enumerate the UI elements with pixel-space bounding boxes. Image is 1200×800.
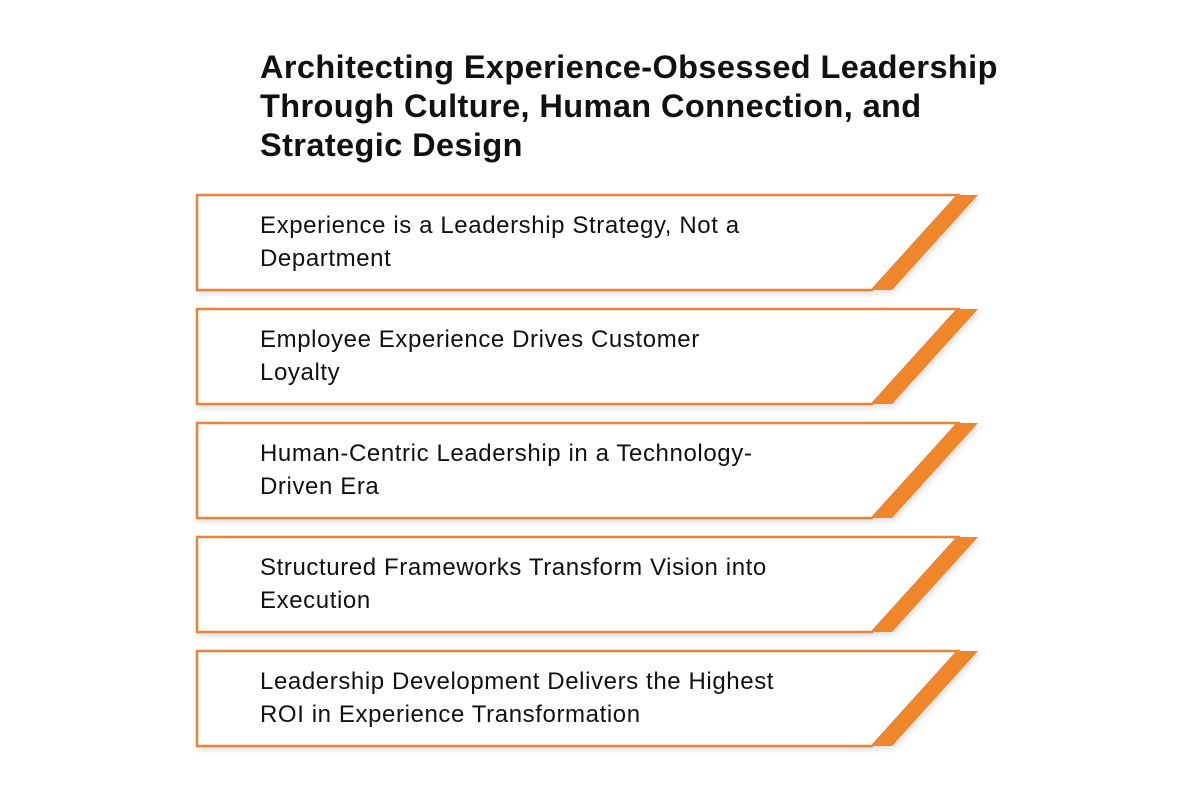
panel: item 1 bbox=[196, 194, 978, 296]
panel: item 2 bbox=[196, 308, 978, 410]
title bbox=[260, 49, 998, 163]
panel: item 1: Experience is a Leadership Strategy, Not a bbox=[260, 212, 740, 239]
panel: item 4: Structured Frameworks Transform Vision into bbox=[260, 554, 767, 581]
panel: item 5: ROI in Experience Transformation bbox=[260, 701, 641, 728]
panel: item 5 bbox=[196, 650, 978, 752]
panel: item 5: Leadership Development Delivers the Highest bbox=[260, 668, 774, 695]
panel: item 3: Driven Era bbox=[260, 473, 379, 500]
panel: item 1: Department bbox=[260, 245, 391, 272]
panel: item 4: Execution bbox=[260, 587, 371, 614]
title: Strategic Design bbox=[260, 127, 523, 163]
panel: item 2: Employee Experience Drives Customer bbox=[260, 326, 700, 353]
title: Architecting Experience-Obsessed Leadership bbox=[260, 49, 998, 85]
title: Through Culture, Human Connection, and bbox=[260, 88, 922, 124]
panel: item 3 bbox=[196, 422, 978, 524]
panel: item 2: Loyalty bbox=[260, 359, 340, 386]
panel: item 4 bbox=[196, 536, 978, 638]
panel: item 3: Human-Centric Leadership in a Technology- bbox=[260, 440, 752, 467]
